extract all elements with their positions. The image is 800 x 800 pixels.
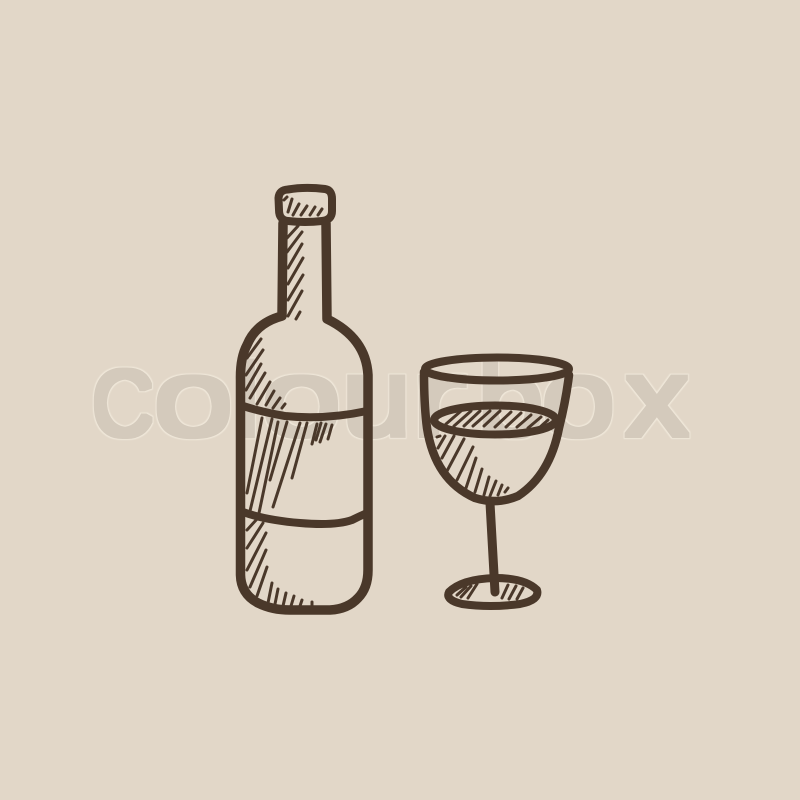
bottle cap <box>278 188 332 222</box>
watermark: Colourbox: r <box>410 336 467 459</box>
watermark: Colourbox <box>92 336 689 460</box>
icon: wine bottle <box>240 188 368 610</box>
bottle label bottom line <box>243 512 367 524</box>
bottle outline <box>240 223 368 610</box>
watermark: Colourbox: l <box>233 343 261 458</box>
glass bowl <box>424 372 569 501</box>
watermark: Colourbox: C <box>92 351 153 455</box>
watermark: Colourbox: o <box>541 336 616 459</box>
glass hatching <box>437 411 548 599</box>
bottle hatching <box>246 197 332 606</box>
icon: wine glass <box>424 358 569 606</box>
glass rim <box>425 358 569 380</box>
watermark: Colourbox: x <box>626 337 689 460</box>
glass base <box>448 578 537 606</box>
watermark: Colourbox: b <box>477 342 544 458</box>
bottle label top line <box>243 406 367 417</box>
glass stem <box>490 503 495 592</box>
watermark: Colourbox: o <box>261 338 342 459</box>
wine surface <box>434 406 556 434</box>
watermark: Colourbox: u <box>342 337 412 460</box>
watermark: Colourbox: o <box>153 338 234 459</box>
